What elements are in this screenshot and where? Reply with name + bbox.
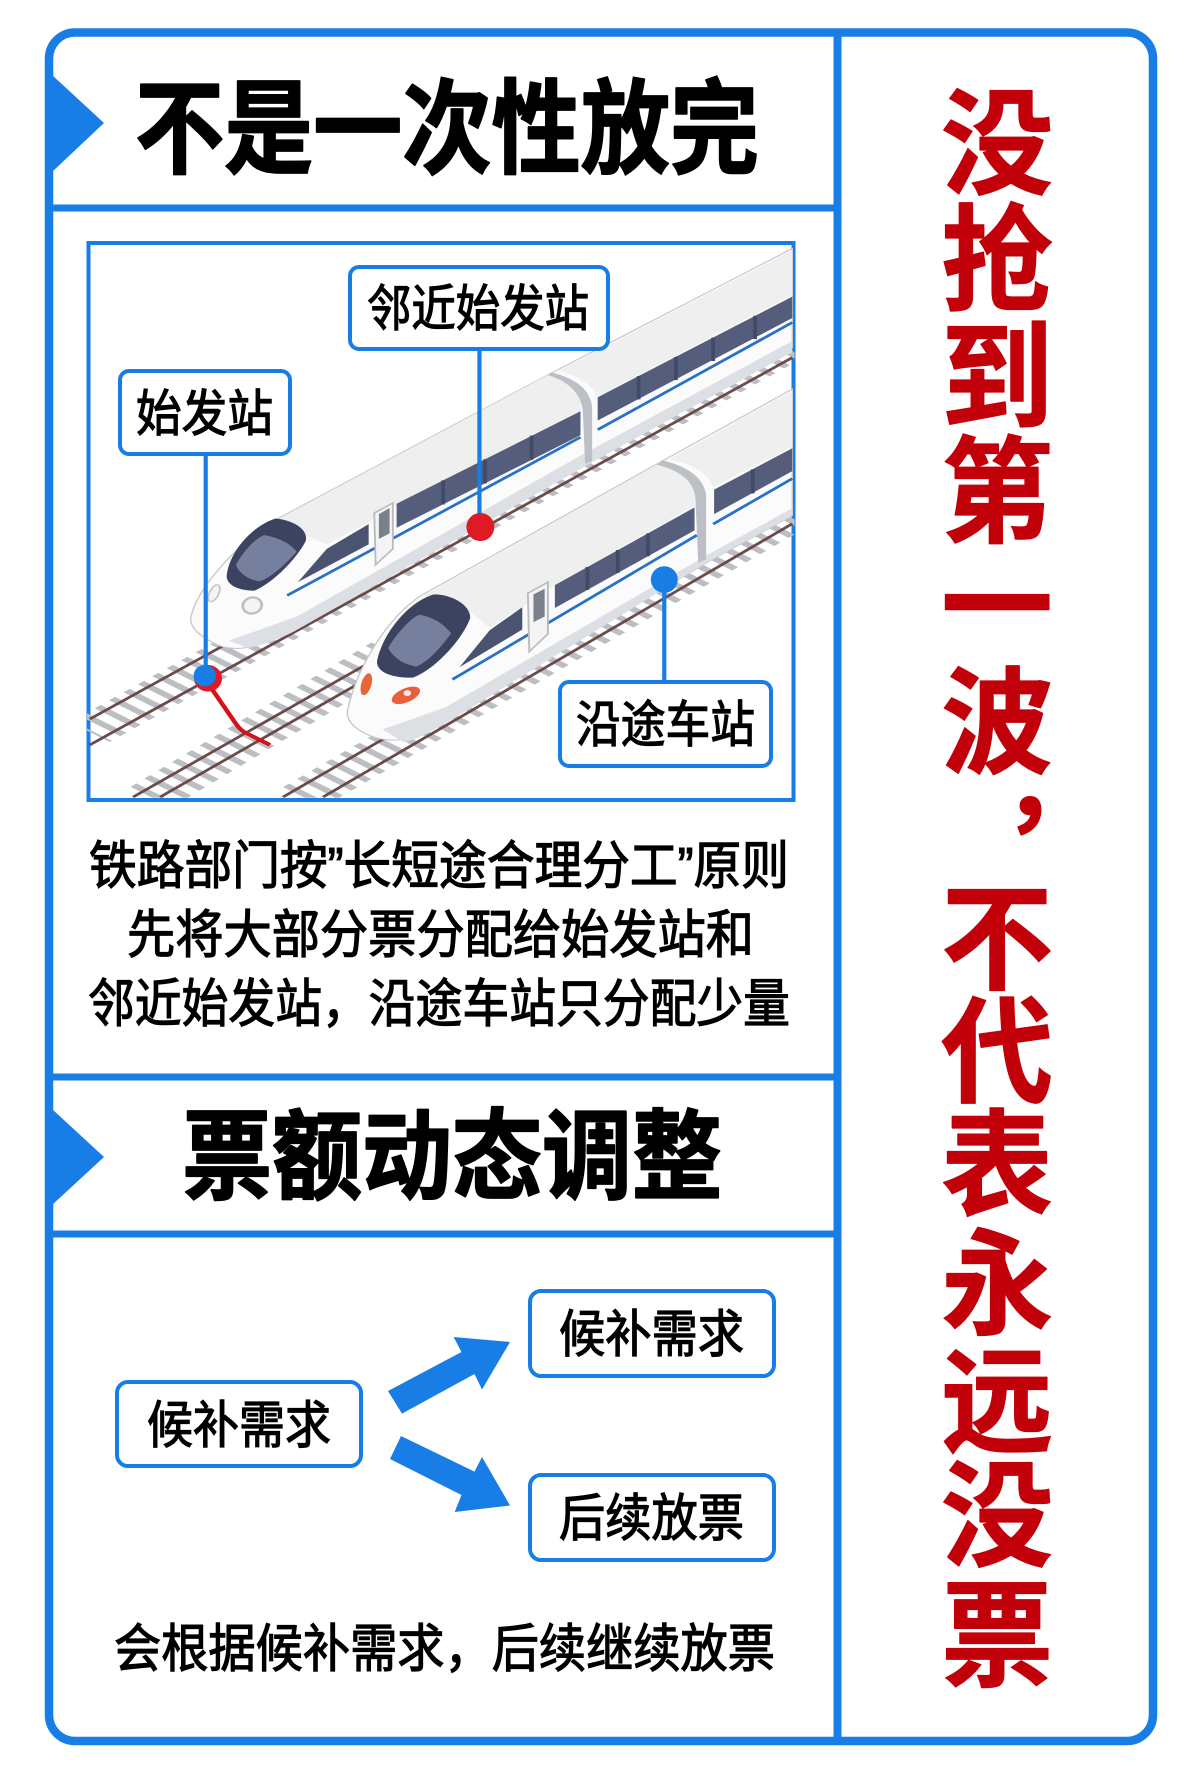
panel: not released at once xyxy=(52,72,812,1034)
train illustration xyxy=(70,248,812,809)
vertical headline xyxy=(941,81,1103,1702)
text block: allocation rule: 邻近始发站，沿途车站只分配少量 xyxy=(88,976,790,1034)
flow box: waitlist demand output: 候补需求 xyxy=(559,1306,744,1363)
label: adjacent origin station: 邻近始发站 xyxy=(367,281,589,337)
text block: allocation rule: 铁路部门按”长短途合理分工”原则 xyxy=(89,838,789,896)
heading: not released at once: 不是一次性放完 xyxy=(135,72,759,187)
vertical headline: 票 xyxy=(941,1573,1053,1702)
vertical headline: 抢 xyxy=(941,197,1053,326)
arrow: down xyxy=(390,1436,510,1512)
vertical headline: 到 xyxy=(941,314,1053,443)
vertical headline: 没 xyxy=(941,81,1053,210)
text block: allocation rule xyxy=(88,838,790,1034)
flow box: waitlist demand xyxy=(117,1382,361,1466)
vertical headline: 一 xyxy=(941,543,1053,672)
vertical headline: ， xyxy=(1001,730,1103,843)
vertical headline: 表 xyxy=(941,1102,1053,1231)
marker: adjacent station xyxy=(466,350,494,541)
vertical headline: 第 xyxy=(941,429,1053,558)
connector: red branch line xyxy=(210,687,270,745)
column divider xyxy=(834,32,842,1740)
icon: header marker one xyxy=(52,75,104,172)
arrow: up xyxy=(388,1337,510,1414)
railway tracks xyxy=(87,351,795,798)
marker: origin station xyxy=(194,454,222,692)
label: adjacent origin station xyxy=(350,267,608,349)
text block: allocation rule: 先将大部分票分配给始发站和 xyxy=(127,907,754,965)
flow box: later release xyxy=(530,1475,774,1560)
text block: release note: 会根据候补需求，后续继续放票 xyxy=(114,1621,775,1679)
section rule xyxy=(49,1074,837,1080)
header rule one xyxy=(49,204,837,212)
label: origin station xyxy=(120,371,290,454)
heading: dynamic quota adjustment: 票额动态调整 xyxy=(182,1102,722,1212)
panel: dynamic quota xyxy=(52,1102,775,1679)
vertical headline: 远 xyxy=(941,1339,1053,1468)
header rule two xyxy=(49,1230,837,1238)
train: lower xyxy=(347,389,792,742)
label: en-route station xyxy=(560,682,771,766)
flow box: waitlist demand: 候补需求 xyxy=(147,1397,331,1454)
marker: en-route station xyxy=(651,566,678,683)
vertical headline: 波 xyxy=(941,660,1053,789)
flow box: waitlist demand output xyxy=(530,1291,774,1376)
train: upper xyxy=(191,248,792,648)
vertical headline: 没 xyxy=(941,1453,1053,1582)
vertical headline: 不 xyxy=(941,876,1053,1005)
label: en-route station: 沿途车站 xyxy=(576,697,755,753)
label: origin station: 始发站 xyxy=(136,386,273,442)
vertical headline: 永 xyxy=(941,1221,1053,1350)
flow box: later release: 后续放票 xyxy=(559,1490,744,1547)
image panel: trains xyxy=(70,243,812,809)
vertical headline: 代 xyxy=(941,989,1053,1118)
icon: header marker two xyxy=(52,1109,104,1205)
